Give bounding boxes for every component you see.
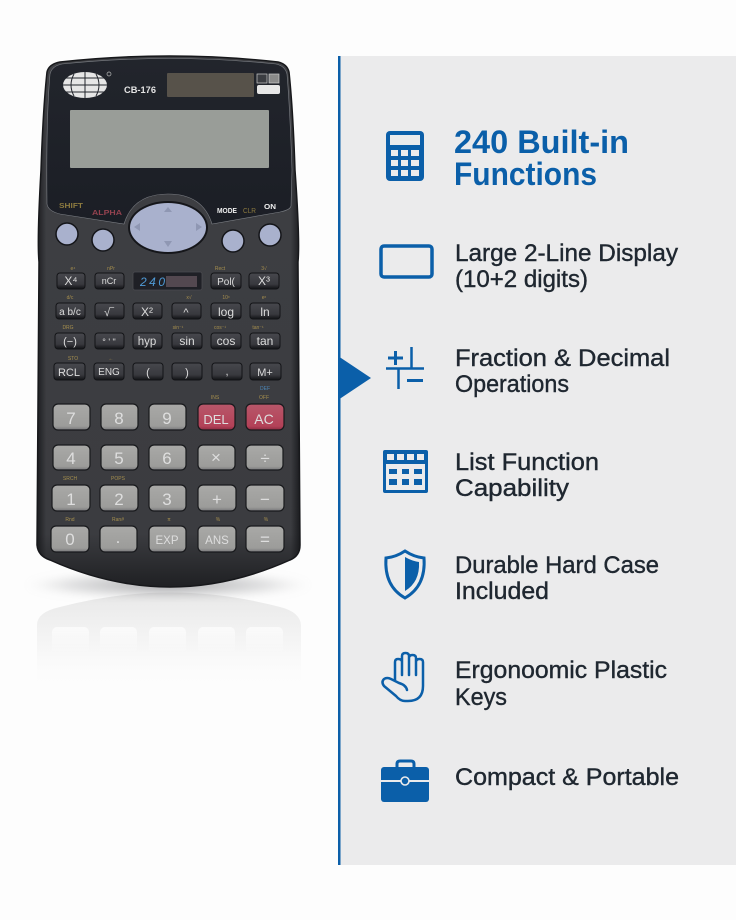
- feature: hard case: [386, 551, 659, 605]
- feature: fractions: [386, 345, 670, 398]
- gray number keys: 0: [65, 530, 75, 549]
- feature: plastic keys: [382, 653, 667, 711]
- small secondary labels: e⁴: [71, 266, 75, 272]
- label: (10+2 digits): [455, 266, 588, 293]
- LCD screen: [70, 110, 269, 168]
- label: Durable Hard Case: [455, 552, 659, 579]
- small secondary labels: Ran#: [112, 517, 124, 523]
- model name: CB-176: [124, 85, 156, 96]
- brand globe logo: [63, 72, 111, 98]
- small secondary labels: %: [264, 517, 269, 523]
- icon: display rectangle: [381, 246, 432, 277]
- small secondary labels: STO: [68, 356, 78, 362]
- feature: 240 functions: Functions: [454, 156, 597, 192]
- dark keys: a b/c: [59, 307, 81, 318]
- solar panel: [167, 73, 254, 97]
- small secondary labels: INS: [211, 395, 220, 401]
- gray number keys: EXP: [155, 535, 179, 547]
- gray number keys: 1: [66, 490, 76, 509]
- small secondary labels: %: [216, 517, 221, 523]
- small secondary labels: 10ˣ: [222, 295, 230, 301]
- mode labels: SHIFT: [59, 201, 83, 210]
- mini display: 240: [139, 275, 165, 289]
- round buttons: [56, 223, 281, 252]
- icon: hand: [382, 653, 423, 701]
- gray number keys: AC: [254, 411, 274, 427]
- gray number keys: .: [116, 528, 120, 547]
- mode labels: ON: [264, 202, 276, 211]
- small secondary labels: 3√: [261, 265, 267, 272]
- small secondary labels: tan⁻¹: [252, 325, 264, 331]
- dark keys: ): [185, 367, 189, 379]
- small secondary labels: eˣ: [262, 295, 267, 301]
- label: Included: [455, 578, 549, 605]
- gray number keys: 8: [114, 409, 124, 428]
- panel: features background: [340, 56, 736, 865]
- small secondary labels: [62, 265, 270, 523]
- icon: shield: [386, 551, 424, 598]
- mode labels: [59, 201, 276, 217]
- gray number keys: 3: [162, 490, 172, 509]
- mini display: [133, 272, 202, 290]
- dark keys: (−): [63, 336, 77, 348]
- gray number keys: [51, 404, 284, 552]
- small secondary labels: SRCH: [63, 476, 77, 482]
- dark keys: M+: [257, 367, 273, 379]
- gray number keys: 7: [66, 409, 76, 428]
- gray number keys: ANS: [205, 535, 229, 547]
- label: [455, 240, 678, 293]
- gray number keys: 6: [162, 449, 172, 468]
- small secondary labels: Rnd: [65, 517, 75, 523]
- faceplate: [47, 58, 292, 224]
- feature: display: [381, 240, 678, 293]
- mode labels: CLR: [243, 206, 256, 215]
- small secondary labels: Rect: [215, 266, 226, 272]
- dark keys: ° ' ": [102, 337, 116, 347]
- gray number keys: +: [212, 490, 222, 509]
- label: [455, 345, 670, 398]
- gray number keys: 2: [114, 490, 124, 509]
- small secondary labels: π: [167, 517, 171, 523]
- gray number keys: 5: [114, 449, 124, 468]
- label: Ergonoomic Plastic: [455, 657, 667, 684]
- dark keys: ,: [225, 366, 229, 378]
- small secondary labels: cos⁻¹: [214, 325, 226, 331]
- badges: [257, 74, 280, 94]
- dark keys: X²: [141, 305, 153, 319]
- dark keys: tan: [257, 334, 273, 348]
- gray number keys: =: [260, 530, 270, 549]
- dark keys: X³: [258, 274, 270, 288]
- dark keys: RCL: [58, 367, 80, 379]
- label: Operations: [455, 371, 569, 398]
- dark keys: X⁴: [64, 274, 78, 288]
- small secondary labels: POPS: [111, 476, 126, 482]
- calculator: [37, 56, 300, 587]
- icon: calculator: [386, 131, 424, 181]
- label: [455, 449, 599, 502]
- small secondary labels: d/c: [67, 295, 74, 301]
- small secondary labels: DRG: [62, 325, 74, 331]
- navigation pad: [128, 201, 208, 254]
- small secondary labels: OFF: [259, 395, 269, 401]
- gray number keys: −: [260, 490, 270, 509]
- label: Fraction & Decimal: [455, 345, 670, 372]
- gray number keys: ÷: [260, 449, 270, 468]
- gray number keys: ×: [211, 448, 221, 467]
- vertical divider and pointer: [338, 56, 371, 865]
- small secondary labels: nPr: [107, 266, 115, 272]
- feature: portable: [381, 761, 679, 802]
- gray number keys: 9: [162, 409, 172, 428]
- red keys: [198, 404, 284, 430]
- dark keys: ln: [260, 305, 270, 319]
- small secondary labels: sin⁻¹: [173, 325, 184, 331]
- icon: fraction symbols: [386, 347, 424, 389]
- dark keys: [54, 273, 281, 380]
- label: List Function: [455, 449, 599, 476]
- calculator shadow: [26, 571, 310, 599]
- gray number keys: 4: [66, 449, 76, 468]
- heading: 240 Built-in: [454, 124, 629, 160]
- dark keys: cos: [217, 334, 235, 348]
- dark keys: (: [146, 367, 150, 379]
- small secondary labels: DEF: [260, 386, 270, 392]
- dark keys: Pol(: [217, 277, 236, 288]
- feature: 240 functions: [386, 124, 629, 192]
- small secondary labels: ←: [108, 356, 114, 362]
- dark keys: nCr: [102, 276, 116, 286]
- label: Capability: [455, 475, 569, 502]
- icon: list grid: [383, 450, 428, 493]
- calculator body: [37, 56, 300, 587]
- mode labels: MODE: [217, 206, 237, 215]
- small secondary labels: x√: [186, 294, 192, 301]
- label: [455, 657, 667, 711]
- dark keys: ^: [183, 307, 189, 319]
- label: Compact & Portable: [455, 764, 679, 791]
- dark keys: ENG: [98, 367, 120, 378]
- dark keys: sin: [179, 334, 195, 348]
- gray number keys: DEL: [203, 412, 229, 427]
- mode labels: ALPHA: [92, 208, 123, 217]
- label: [455, 552, 659, 605]
- reflection of calculator: [37, 592, 301, 690]
- feature: list function: [383, 449, 599, 502]
- dark keys: hyp: [138, 336, 156, 348]
- label: Keys: [455, 684, 507, 711]
- label: Large 2-Line Display: [455, 240, 678, 267]
- dark keys: √‾: [104, 307, 115, 319]
- dark keys: log: [218, 305, 234, 319]
- icon: briefcase: [381, 761, 429, 802]
